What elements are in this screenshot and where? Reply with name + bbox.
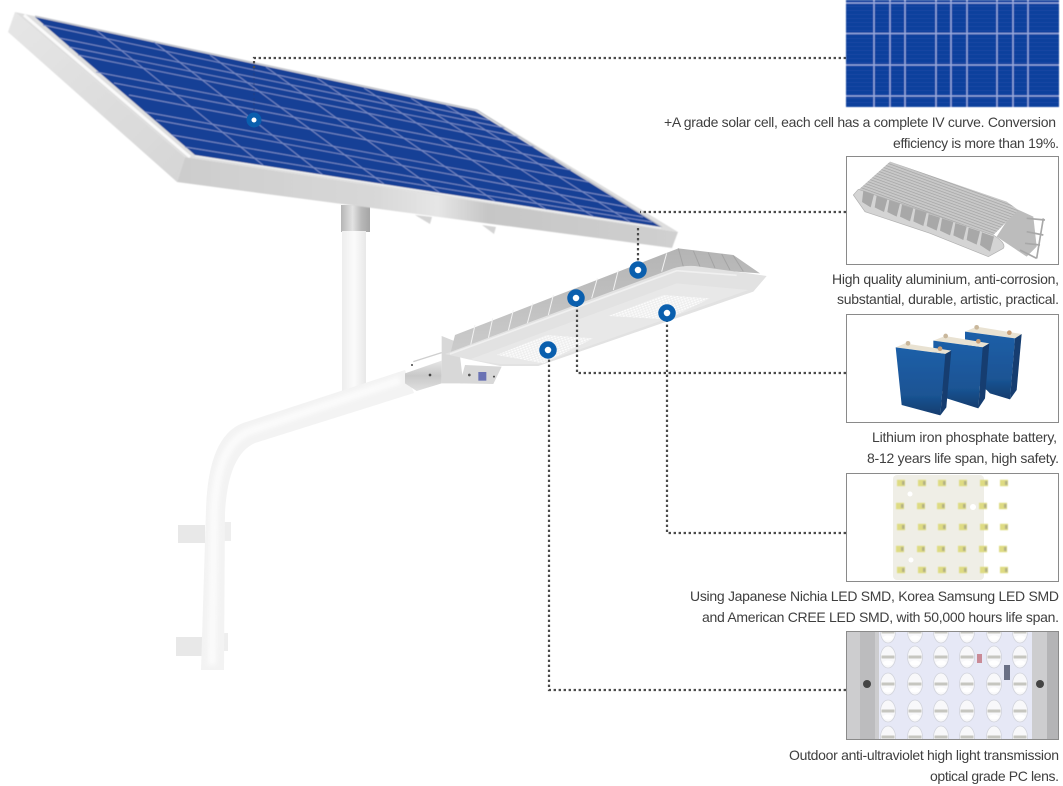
pole connector: [405, 361, 442, 391]
solar panel: [8, 12, 678, 248]
text: housing description: High quality aluminium, anti-corrosion,: [832, 271, 1059, 287]
panel: LED board image: [846, 474, 1058, 582]
panel left frame: [8, 12, 185, 182]
dotted leader lines: [254, 58, 846, 690]
text: housing description: substantial, durable, artistic, practical.: [837, 291, 1059, 307]
arm support post: [341, 205, 370, 232]
text: LED description: Using Japanese Nichia LED SMD, Korea Samsung LED SMD: [690, 588, 1059, 604]
callout markers: [249, 115, 673, 356]
text: lens description: [789, 747, 1059, 784]
panel light top edge: [35, 16, 662, 227]
panel: lithium battery image: [846, 314, 1058, 422]
text: LED description: and American CREE LED SMD, with 50,000 hours life span.: [702, 609, 1059, 625]
mounting bracket: [442, 336, 463, 383]
leader: LED chip: [667, 320, 846, 533]
LED lamp head: [405, 248, 767, 391]
lens array: [880, 632, 1028, 739]
leader: aluminium housing: [640, 211, 846, 213]
panel grid lines: [43, 25, 652, 222]
text: lens description: Outdoor anti-ultraviolet high light transmission: [789, 747, 1059, 763]
panel: aluminium housing image: [846, 156, 1058, 264]
marker: LED: [661, 307, 673, 319]
under block with label: [460, 365, 502, 384]
text: lens description: optical grade PC lens.: [930, 768, 1059, 784]
heat sink fins: [450, 248, 760, 355]
battery cell back: [965, 325, 1022, 399]
lamp housing: [445, 266, 767, 366]
text: battery description: [867, 429, 1059, 466]
marker: solar panel: [249, 115, 259, 125]
mount tabs under panel: [415, 215, 432, 224]
text: housing description: [832, 271, 1059, 307]
text: LED description: [690, 588, 1059, 625]
bent arm: [201, 370, 414, 670]
text: battery description: 8-12 years life span, high safety.: [867, 450, 1059, 466]
marker: battery: [570, 292, 582, 304]
text: battery description: Lithium iron phosphate battery,: [872, 429, 1057, 445]
panel: solar cell detail image: [846, 0, 1059, 107]
panel: PC lens image: [846, 631, 1059, 740]
LED modules: [497, 335, 593, 363]
text: solar cell description: +A grade solar cell, each cell has a complete IV curve. Conversion: [664, 114, 1056, 130]
housing ribbed top: [858, 162, 1018, 235]
wall clamps: [176, 522, 231, 656]
leader: lens: [549, 357, 846, 690]
leader: battery: [577, 305, 846, 373]
lens side strips: [847, 632, 879, 739]
battery cell front: [896, 341, 951, 415]
battery cell middle: [933, 334, 989, 408]
street light pole: [176, 205, 414, 670]
marker: lens: [542, 344, 554, 356]
leader: solar cell: [254, 58, 846, 68]
marker: housing: [632, 264, 644, 276]
housing mount bracket: [997, 208, 1037, 257]
panel cell surface: [35, 17, 661, 227]
housing front cavity band: [853, 189, 1004, 257]
text: solar cell description: [664, 114, 1059, 151]
text: solar cell description: efficiency is more than 19%.: [893, 135, 1059, 151]
panel front frame: [177, 157, 678, 248]
